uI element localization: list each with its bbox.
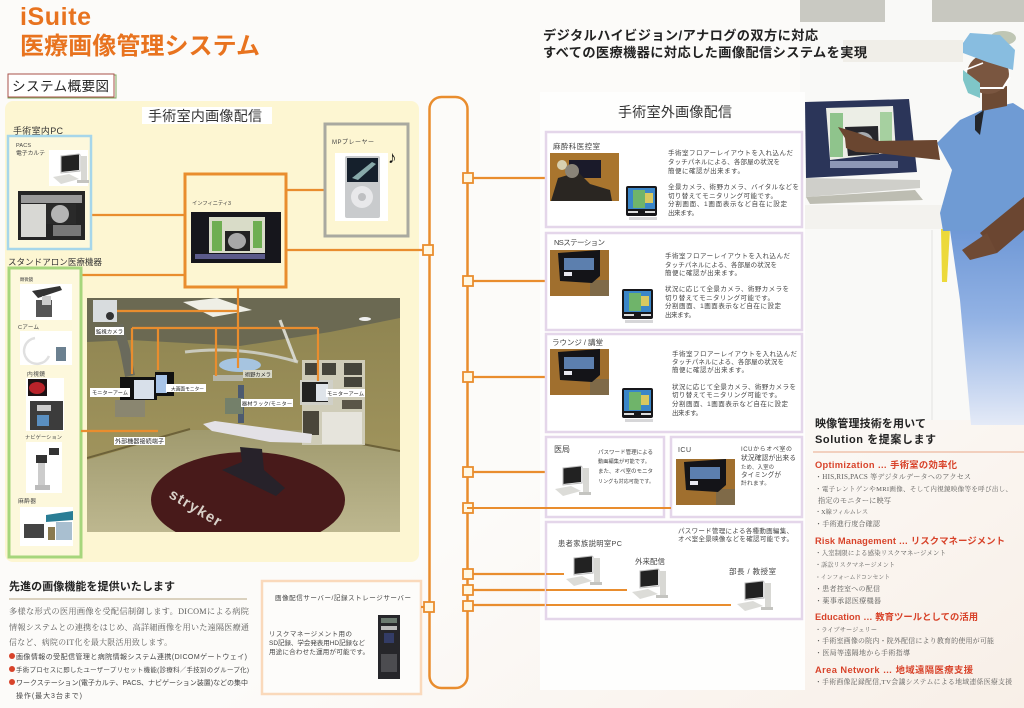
photo connectors: [81, 298, 318, 431]
panel: distribution / storage server: リスクマネージメント用の: [269, 630, 352, 638]
heading: in-OR distribution: 手術室内画像配信: [148, 108, 262, 124]
section: solution proposal: 映像管理技術を用いて: [815, 416, 926, 430]
panel: Infinity 3: インフィニティ3: [192, 200, 231, 207]
icon: desktop PC, outpatient: [632, 569, 668, 599]
description: 状況に応じて全景カメラ、術野カメラを: [665, 284, 789, 293]
connector lines in panel: [81, 190, 428, 298]
photo labels: 大画面モニター: [171, 386, 204, 392]
icon: touch panel: [622, 388, 653, 422]
panel: in-OR PC: 電子カルテ: [16, 150, 45, 157]
solution: optimization: ・手術進行度合確認: [815, 519, 881, 528]
description: [668, 148, 799, 217]
description: 手術室フロアーレイアウトを入れ込んだ: [665, 251, 790, 260]
panel: standalone medical devices: [9, 268, 81, 557]
icon: touch panel: [622, 289, 653, 323]
feature bullets: 操作(最大3台まで): [16, 691, 82, 700]
photo labels: 器材ラック/モニター: [242, 400, 292, 408]
panel: distribution / storage server: SD記録、学会発表用HD記録など: [269, 638, 366, 647]
heading: outside-OR distribution: 手術室外画像配信: [618, 104, 732, 120]
heading: system overview: [8, 74, 116, 98]
description: 切り替えてモニタリング可能です。: [665, 293, 774, 302]
feature bullets: [9, 652, 249, 700]
network bus: [421, 97, 546, 688]
panel: in-OR image distribution: [5, 101, 428, 562]
panel: MP player: ♪: [388, 148, 396, 167]
panel: distribution / storage server: 用途に合わせた運用が可能です。: [269, 647, 369, 656]
section: advanced imaging features: 信など、病院のIT化を最大限活用致します。: [9, 637, 172, 647]
device: anesthesia machine: 麻酔器: [18, 497, 36, 505]
panel: lounge / lecture hall: [546, 334, 802, 432]
photo: ICU: [676, 459, 735, 505]
bus branch lines: [421, 178, 546, 607]
panel: distribution / storage server: [262, 581, 421, 694]
feature bullets: 画像情報の受配信管理と病院情報システム連携(DICOMゲートウェイ): [16, 652, 247, 661]
solution: optimization: ・HIS,RIS,PACS 等デジタルデータへのアクセス: [815, 472, 971, 481]
heading: system overview: システム概要図: [12, 79, 109, 94]
photo: operating room: stryker: [166, 486, 225, 530]
panel: medical office: 医局: [554, 445, 570, 454]
solution: education: ・ライブサージェリー: [815, 626, 877, 634]
description: 簡便に確認が出来ます。: [672, 365, 748, 374]
solution: optimization: [815, 459, 1012, 528]
panel: ICU: ICUからオペ室の: [741, 445, 792, 453]
section: solution proposal: [813, 416, 1024, 686]
solution: risk management: ・薬事承認医療機器: [815, 596, 881, 605]
photo labels: [90, 300, 365, 446]
description: タッチパネルによる、各部屋の状況を: [665, 260, 777, 269]
photo labels: 監視カメラ: [96, 328, 123, 336]
section: advanced imaging features: 先進の画像機能を提供いたします: [9, 579, 175, 593]
panel: ICU: ICU: [678, 447, 691, 454]
panel: medical office: [546, 437, 664, 517]
headline: right page: デジタルハイビジョン/アナログの双方に対応: [543, 27, 818, 43]
photo: lounge: [550, 349, 609, 395]
section: advanced imaging features: [9, 579, 249, 700]
room connection lines: [546, 574, 731, 605]
device: navigation: [25, 433, 62, 493]
icon: touch panel: [626, 186, 657, 220]
photo: NS station: [550, 250, 609, 296]
headline: right page: すべての医療機器に対応した画像配信システムを実現: [543, 44, 867, 60]
feature bullets: 手術プロセスに即したユーザープリセット機能(診療科／手技別のグループ化): [16, 665, 249, 674]
thumbnail: surveillance camera: [93, 300, 117, 322]
description: 全景カメラ、術野カメラ、バイタルなどを: [668, 182, 799, 191]
description: タッチパネルによる、各部屋の状況を: [668, 157, 780, 166]
solution: area network: [815, 664, 1012, 686]
panel: ICU: ため、入室の: [741, 463, 774, 471]
icon: desktop PC: [555, 466, 591, 496]
photo: anesthesiology room: [550, 153, 619, 201]
panel: ICU: [671, 437, 802, 517]
panel: anesthesiology room: 麻酔科医控室: [553, 141, 600, 151]
device: microscope: [20, 276, 72, 320]
description: 分割画面、1画面表示など自在に設定: [665, 301, 782, 310]
photo: surgeon at touch panel: [800, 0, 1024, 425]
device: endoscope: 内視鏡: [27, 370, 45, 378]
description: 分割画面、1画面表示など自在に設定: [668, 199, 788, 208]
device: C-arm: Cアーム: [18, 324, 39, 331]
panel: medical office: 動画編集が可能です。: [598, 457, 650, 465]
panel: medical office: パスワード管理による: [598, 448, 653, 456]
solution: education: ・手術室画像の院内・院外配信により教育的使用が可能: [815, 636, 994, 645]
photo labels: 外部機器接続端子: [115, 438, 164, 446]
section: advanced imaging features: 情報システムとの連携をはじめ、高詳細画像を用いた遠隔医療通: [9, 622, 249, 632]
description: 切り替えてモニタリング可能です。: [672, 390, 781, 399]
photo: operating room: [87, 298, 400, 548]
description: タッチパネルによる、各部屋の状況を: [672, 357, 784, 366]
outside-OR background panel: [540, 92, 805, 690]
title: [20, 3, 260, 60]
feature bullets: ワークステーション(電子カルテ、PACS、ナビゲーション装置)などの集中: [16, 678, 248, 687]
solution: education: Education … 教育ツールとしての活用: [815, 611, 978, 622]
solution: area network: Area Network … 地域遠隔医療支援: [815, 664, 974, 675]
panel: ICU: タイミングが: [741, 470, 781, 479]
description: [672, 349, 798, 417]
panel: other rooms: パスワード管理による各種動画編集、: [678, 526, 793, 535]
device: endoscope: [26, 370, 64, 431]
description: 分割画面、1画面表示など自在に設定: [672, 399, 788, 408]
solution: optimization: 指定のモニターに映写: [818, 496, 891, 505]
label: in-OR PC: 手術室内PC: [13, 125, 64, 136]
solution: optimization: ・電子レントゲンやMRI画像、そして内視鏡映像等を呼び出し、: [815, 484, 1012, 493]
panel: medical office: リングも対応可能です。: [598, 478, 654, 485]
photo labels: モニターアーム: [92, 390, 128, 396]
panel: Infinity 3: [185, 174, 286, 287]
icon: server rack: [378, 615, 400, 679]
solution: optimization: Optimization … 手術室の効率化: [815, 459, 958, 470]
panel: in-OR PC: PACS: [16, 143, 31, 149]
solution: risk management: ・入室制限による感染リスクマネージメント: [815, 548, 946, 557]
solution: risk management: Risk Management … リスクマネージメント: [815, 536, 1005, 546]
description: [665, 251, 790, 319]
headline: right page: [543, 27, 867, 60]
solution: risk management: [815, 536, 1005, 605]
panel: lounge / lecture hall: ラウンジ / 講堂: [552, 337, 604, 347]
panel: NS station: [546, 233, 802, 330]
solution: education: ・医局等遠隔地から手術指導: [815, 648, 910, 657]
icon: desktop PC, family room: [566, 556, 602, 586]
junction squares: [423, 173, 473, 612]
panel: in-OR PC: [8, 136, 91, 249]
section: advanced imaging features: 多様な形式の医用画像を受配信制御します。DICOMによる病院: [9, 606, 249, 616]
solution: risk management: ・訴訟リスクマネージメント: [815, 561, 895, 569]
description: 状況に応じて全景カメラ、術野カメラを: [672, 382, 796, 391]
description: 簡便に確認が出来ます。: [665, 268, 741, 277]
description: 手術室フロアーレイアウトを入れ込んだ: [668, 148, 794, 157]
panel: other rooms: オペ室全景映像などを確認可能です。: [678, 534, 793, 543]
solution: education: [815, 611, 994, 657]
photo labels: モニターアーム: [327, 390, 364, 398]
title: iSuite: [20, 3, 91, 31]
panel: NS station: NSステーション: [554, 238, 605, 247]
description: 出来ます。: [668, 208, 698, 217]
device: microscope: 顕微鏡: [20, 276, 34, 283]
description: 出来ます。: [665, 310, 695, 319]
label: standalone devices: スタンドアロン医療機器: [8, 257, 102, 267]
solution: risk management: ・患者控室への配信: [815, 584, 880, 593]
panel: ICU: 計れます。: [741, 479, 770, 487]
description: 切り替えてモニタリング可能です。: [668, 191, 777, 200]
title: 医療画像管理システム: [20, 33, 260, 60]
device: navigation: ナビゲーション: [25, 433, 62, 441]
panel: other rooms: [546, 522, 802, 619]
description: 簡便に確認が出来ます。: [668, 166, 744, 175]
photo labels: 術野カメラ: [245, 370, 271, 378]
solution: risk management: ・インフォームドコンセント: [815, 574, 890, 581]
panel: ICU: 状況確認が出来る: [741, 453, 796, 462]
line to ICU: [467, 507, 671, 509]
panel: other rooms: 外来配信: [635, 556, 666, 566]
panel: medical office: また、オペ室のモニタ: [598, 467, 653, 475]
panel: distribution / storage server: 画像配信サーバー/記録ストレージサーバー: [275, 593, 411, 602]
panel: MP player: MPプレーヤー: [332, 139, 374, 146]
panel: other rooms: 部長 / 教授室: [729, 566, 776, 576]
icon: desktop PC, professor: [737, 581, 773, 611]
device: C-arm: [18, 324, 72, 365]
device: anesthesia machine: [18, 497, 73, 546]
section: solution proposal: Solution を提案します: [815, 432, 936, 446]
panel: anesthesiology room: [546, 132, 802, 227]
panel: other rooms: 患者家族説明室PC: [558, 539, 622, 548]
description: 出来ます。: [672, 408, 702, 417]
description: 手術室フロアーレイアウトを入れ込んだ: [672, 349, 798, 358]
solution: area network: ・手術画像記録配信,TV会議システムによる地域連係医療支援: [815, 677, 1012, 686]
solution: optimization: ・X線フィルムレス: [815, 508, 868, 516]
panel: MP player: [325, 124, 408, 236]
